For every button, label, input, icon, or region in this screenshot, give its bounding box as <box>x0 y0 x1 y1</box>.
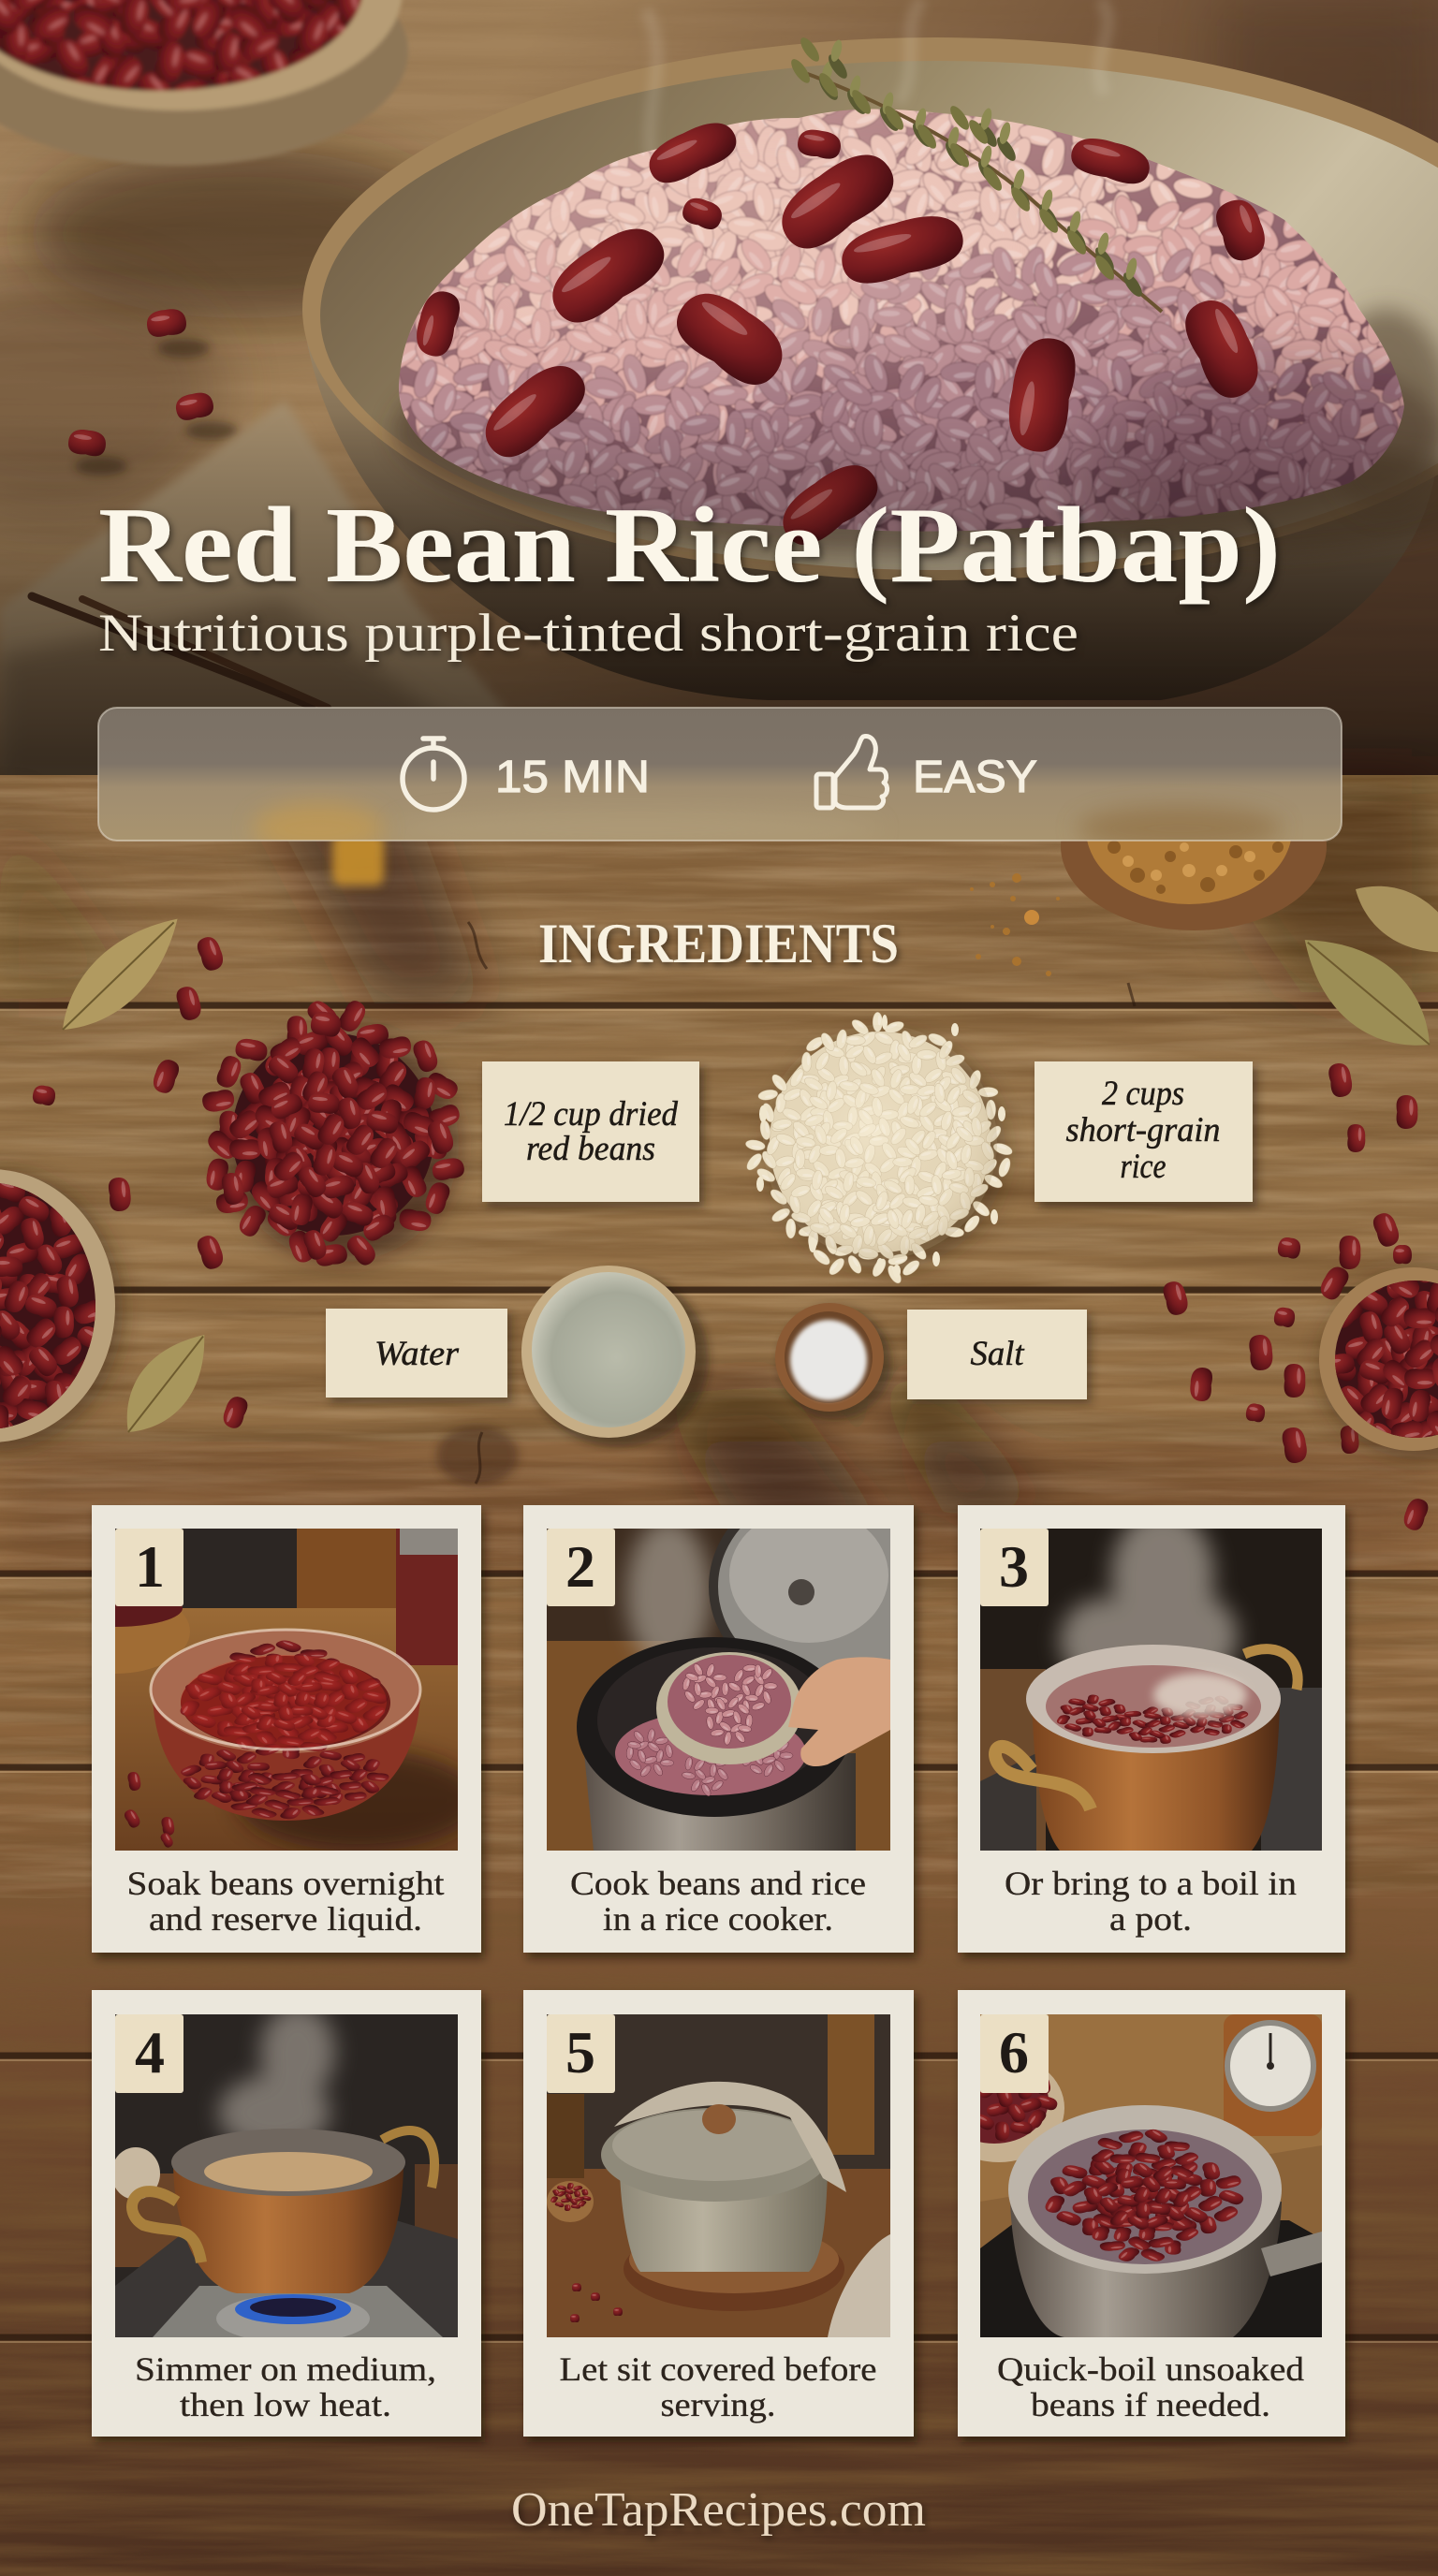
caption: Let sit covered before <box>560 2350 876 2388</box>
step card 6: beans if needed. <box>1031 2386 1270 2423</box>
spice bowl <box>1061 754 1327 930</box>
ingredient note: dried red beans: 1/2 cup dried <box>504 1095 678 1134</box>
step card 6: 6 <box>999 2019 1029 2086</box>
number badge <box>547 1529 615 1606</box>
number badge <box>547 2014 615 2093</box>
caption: Simmer on medium, <box>135 2350 436 2388</box>
folded napkin and chopsticks <box>0 401 562 777</box>
ingredient note: water: Water <box>374 1335 460 1373</box>
step card 4 <box>92 1990 485 2442</box>
ingredient note: water <box>326 1309 512 1403</box>
photo: simmering on gas flame <box>115 2014 458 2337</box>
ingredient note: dried red beans <box>482 1061 704 1208</box>
scattered beans on wood <box>32 934 1431 1532</box>
bowl of beans, left edge <box>0 1160 134 1460</box>
salt bowl <box>775 1303 891 1419</box>
step card 3 <box>958 1505 1349 1958</box>
icon: thumbs up <box>816 737 888 808</box>
whole red beans on rice <box>411 114 1271 554</box>
spice crumbs <box>970 873 1060 976</box>
photo: quick-boiling beans in steel saucepan <box>980 2014 1322 2337</box>
step card 5: 5 <box>565 2019 595 2086</box>
step card 1: and reserve liquid. <box>149 1900 422 1938</box>
difficulty label: EASY <box>913 753 1037 802</box>
ingredient note: dried red beans: red beans <box>526 1130 655 1168</box>
title: Red Bean Rice (Patbap) <box>98 486 1281 605</box>
ingredient note: short-grain rice: 2 cups <box>1102 1075 1184 1113</box>
number badge <box>980 1529 1049 1606</box>
bowl rim <box>302 37 1438 580</box>
ingredients heading: INGREDIENTS <box>538 913 899 974</box>
step card 3: a pot. <box>1109 1900 1192 1938</box>
ingredient: short-grain rice pile <box>728 1006 1032 1291</box>
thyme sprig <box>788 35 1162 312</box>
caption: Quick-boil unsoaked <box>997 2350 1304 2388</box>
step card 3: 3 <box>999 1533 1029 1600</box>
number badge <box>115 2014 183 2093</box>
photo: rice cooker with measuring cup <box>547 1529 890 1851</box>
ingredient note: short-grain rice: rice <box>1120 1148 1167 1186</box>
bowl of beans, right edge <box>1311 1264 1438 1470</box>
caption: Soak beans overnight <box>127 1865 445 1902</box>
step card 5: serving. <box>661 2386 775 2423</box>
step card 2 <box>523 1486 942 1958</box>
step card 2: 2 <box>565 1533 595 1600</box>
ingredient note: salt: Salt <box>970 1335 1025 1373</box>
step card 5 <box>523 1990 917 2442</box>
photo: covered pot resting on a trivet <box>547 2014 890 2337</box>
rice mound <box>399 109 1404 532</box>
number badge <box>980 2014 1049 2093</box>
loose red beans on hero table <box>67 307 238 476</box>
ingredient: red bean pile <box>179 976 492 1300</box>
hero dark gradient behind title <box>0 412 1438 777</box>
bay leaves <box>44 868 1438 1448</box>
bowl body <box>302 309 1438 700</box>
step card 6 <box>933 1990 1349 2442</box>
wood table background with planks <box>0 775 1438 2576</box>
amber oil jar blurred behind bar <box>332 833 384 886</box>
caption: Cook beans and rice <box>570 1865 866 1902</box>
steam <box>646 0 1108 178</box>
step card 2: in a rice cooker. <box>603 1900 833 1938</box>
step card 1 <box>40 1505 485 1958</box>
photo: soaking beans in a glass bowl <box>115 1529 458 1851</box>
ingredient note: short-grain rice <box>1034 1061 1257 1208</box>
step card 4: then low heat. <box>180 2386 391 2423</box>
subtitle: Nutritious purple-tinted short-grain rice <box>98 604 1078 663</box>
number badge <box>115 1529 183 1606</box>
step card 1: 1 <box>135 1533 165 1600</box>
small bowl of beans, top left <box>0 0 408 167</box>
photo: copper pot coming to a boil <box>980 1529 1322 1851</box>
ingredient note: salt <box>907 1310 1092 1404</box>
step card 4: 4 <box>135 2019 165 2086</box>
icon: stopwatch <box>403 739 464 810</box>
hero background: wooden table with blurred light <box>0 0 1438 777</box>
ingredient note: short-grain rice: short-grain <box>1065 1111 1221 1149</box>
water bowl <box>521 1266 709 1447</box>
frosted info bar <box>98 708 1342 855</box>
time label: 15 MIN <box>495 753 650 802</box>
footer site name: OneTapRecipes.com <box>511 2483 926 2537</box>
caption: Or bring to a boil in <box>1005 1865 1297 1902</box>
main bowl of red bean rice <box>302 0 1438 700</box>
